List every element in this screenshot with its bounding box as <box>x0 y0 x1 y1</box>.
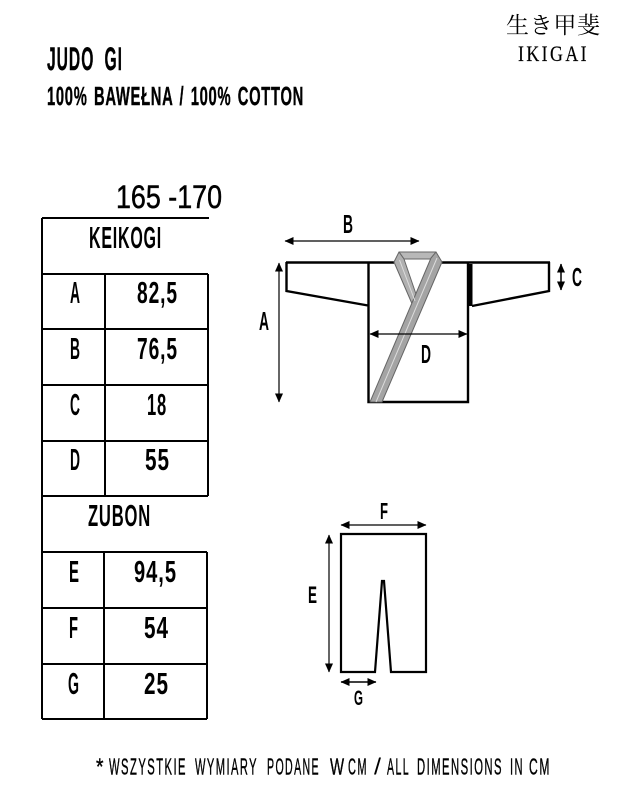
table: keikogi: 82,5 <box>137 275 178 310</box>
footnote: W <box>330 754 346 780</box>
label B: B <box>343 209 353 239</box>
footnote: PODANE <box>267 754 320 780</box>
collar <box>370 252 442 402</box>
diagram: trousers <box>341 534 426 672</box>
label A: A <box>259 306 269 336</box>
table: keikogi: KEIKOGI <box>89 220 162 255</box>
label E: E <box>308 582 317 609</box>
table: keikogi: C <box>70 387 80 422</box>
table: zubon: 25 <box>144 666 169 701</box>
footnote: CM <box>529 754 551 780</box>
footnote: IN <box>510 754 524 780</box>
table: keikogi: 76,5 <box>137 331 178 366</box>
subtitle: material: 100% BAWEŁNA / 100% COTTON <box>47 81 304 111</box>
table: zubon: F <box>69 610 78 645</box>
label G: G <box>354 687 363 710</box>
brand logo <box>506 13 600 66</box>
arrow B <box>285 240 419 242</box>
diagram: jacket <box>286 252 550 402</box>
footnote: CM <box>348 754 368 780</box>
label D: D <box>421 339 431 369</box>
footnote: / <box>374 754 382 780</box>
table: keikogi: 18 <box>147 387 167 422</box>
footnote <box>96 754 551 780</box>
table: keikogi <box>42 218 209 496</box>
label F: F <box>380 498 388 524</box>
label C: C <box>572 262 582 292</box>
table: keikogi: 55 <box>145 442 170 477</box>
table: zubon: E <box>69 554 79 589</box>
table: zubon: 94,5 <box>134 554 177 589</box>
footnote: ALL <box>387 754 410 780</box>
footnote: WSZYSTKIE <box>109 754 187 780</box>
footnote: WYMIARY <box>195 754 258 780</box>
arrow F <box>341 524 426 526</box>
footnote: DIMENSIONS <box>417 754 503 780</box>
table: zubon <box>42 496 207 719</box>
size heading: 165 -170 <box>116 179 222 215</box>
arrow E <box>328 535 330 672</box>
footnote: * <box>96 754 106 780</box>
text: JUDO GI <box>47 41 123 77</box>
arrow C <box>560 264 562 290</box>
table: zubon: 54 <box>144 610 169 645</box>
table: keikogi: B <box>70 331 80 366</box>
table: keikogi: A <box>70 275 80 310</box>
table: zubon: G <box>68 666 79 701</box>
armhole shading <box>468 264 472 306</box>
brand logo: IKIGAI <box>518 41 589 66</box>
table: keikogi: D <box>70 442 80 477</box>
arrow G <box>341 681 376 683</box>
brand logo: 生き甲斐 <box>506 13 600 38</box>
arrow A <box>278 263 280 402</box>
table: zubon: ZUBON <box>88 498 151 533</box>
arrow D <box>370 333 467 335</box>
